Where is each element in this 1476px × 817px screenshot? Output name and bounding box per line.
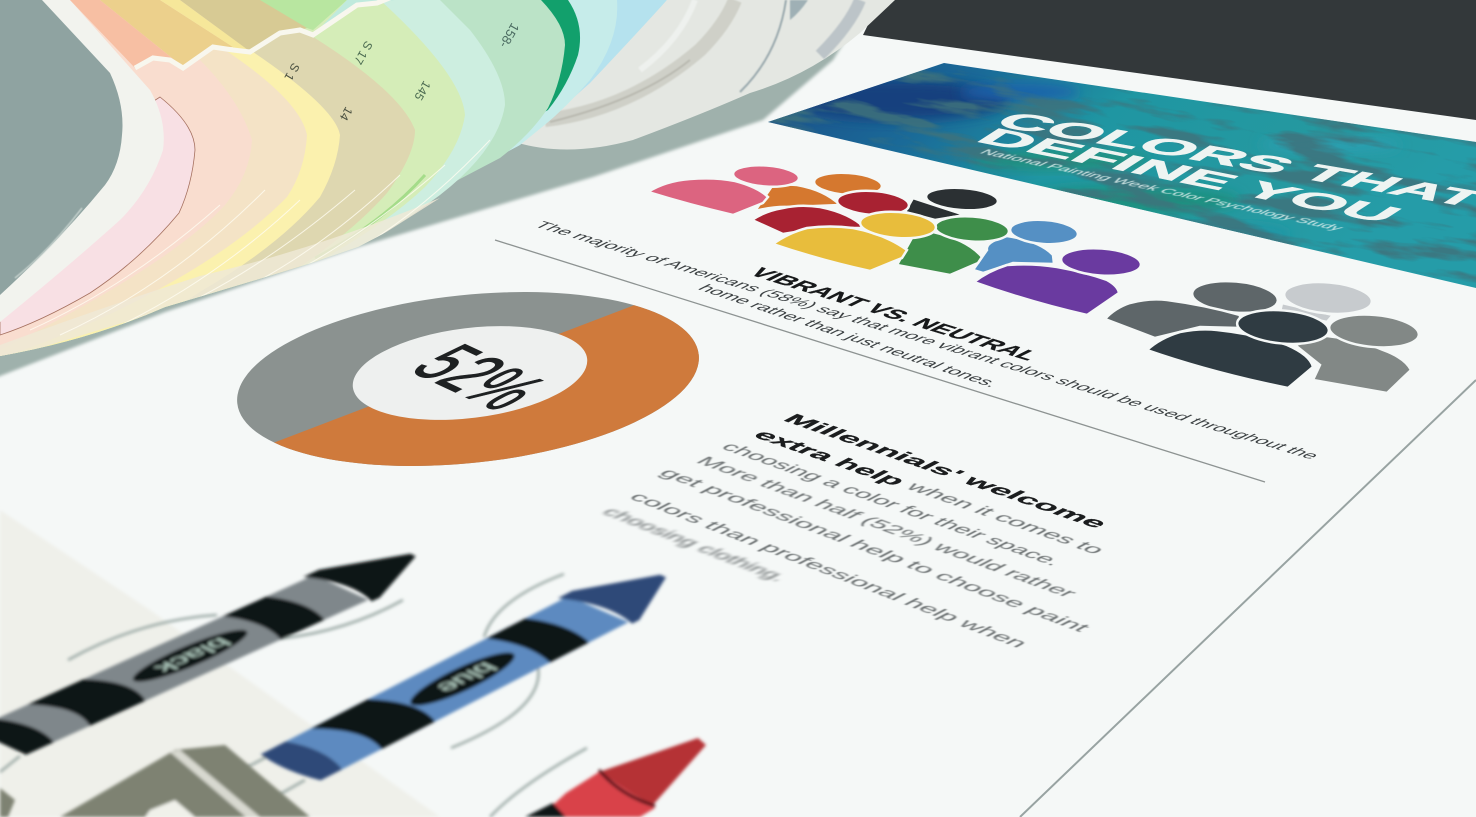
heading line 1: Millennials' welcome xyxy=(777,411,1113,531)
light green swatch xyxy=(440,0,565,180)
crayon tip xyxy=(599,738,706,806)
salmon swatch xyxy=(70,0,177,68)
fan shadow on paper xyxy=(0,0,870,380)
yellow strip xyxy=(160,0,248,50)
donut chart 52% xyxy=(237,292,699,466)
pink swatch stack xyxy=(0,97,195,335)
roll body xyxy=(515,0,895,150)
crayon body xyxy=(254,561,697,784)
heading: VIBRANT VS. NEUTRAL xyxy=(743,265,1046,363)
swatch code: S 1: S 1 xyxy=(281,60,303,83)
gloss highlight on gray card xyxy=(15,208,82,278)
orange person xyxy=(755,171,883,211)
title line 2: DEFINE YOU xyxy=(967,124,1410,227)
gold swatch xyxy=(100,0,233,68)
body line 1: when it comes to xyxy=(900,479,1111,556)
red person xyxy=(752,189,910,234)
crayon body: blue xyxy=(431,660,504,696)
white swatch roll xyxy=(515,0,895,150)
lighter stripe xyxy=(170,750,260,817)
light green swatch above stair xyxy=(260,0,347,30)
cream lower stack xyxy=(0,198,440,360)
green swatch xyxy=(302,0,465,266)
yellow person xyxy=(773,209,937,271)
motion lines xyxy=(236,574,564,800)
swatch code: 145: 145 xyxy=(411,78,434,103)
red crayon xyxy=(490,738,706,817)
layered card edges xyxy=(30,140,490,335)
pale mint tile xyxy=(322,0,392,26)
white card border xyxy=(0,0,164,322)
orange segment xyxy=(274,305,699,466)
donut hole xyxy=(347,314,593,432)
paint swatch fan xyxy=(0,0,667,356)
mint swatches xyxy=(336,0,505,252)
donut value: 52% xyxy=(392,334,568,421)
neutral people icon group xyxy=(1105,278,1420,393)
blue person xyxy=(973,218,1079,273)
dark gray person front xyxy=(1147,307,1330,388)
purple person xyxy=(974,246,1142,315)
yellow swatch xyxy=(2,47,340,356)
body line 5: colors than professional help when xyxy=(624,490,1033,650)
beige swatch xyxy=(34,50,307,332)
white stair line xyxy=(135,0,392,68)
black crayon xyxy=(0,541,443,772)
left olive fragment xyxy=(0,788,15,817)
divider line xyxy=(495,240,1265,482)
body line 4: get professional help to choose paint xyxy=(654,466,1097,635)
olive block xyxy=(60,745,310,817)
vibrant people icon group xyxy=(648,163,1142,315)
gray person right xyxy=(1295,311,1420,393)
light gray person xyxy=(1280,279,1373,322)
crayon body xyxy=(540,772,655,817)
blurred olive shape on neighbouring page xyxy=(0,745,310,817)
banner paint texture xyxy=(723,0,1476,367)
section: vibrant vs neutral text xyxy=(529,220,1324,461)
body line 2: choosing a color for their space. xyxy=(716,440,1069,568)
aqua swatch xyxy=(509,0,617,151)
roll layer streaks xyxy=(545,0,860,122)
body line 1: The majority of Americans (58%) say that more vibrant colors should be used throughout the xyxy=(529,220,1324,461)
subtitle: National Painting Week Color Psychology Study xyxy=(976,148,1348,232)
green person xyxy=(897,214,1010,275)
title line 1: COLORS THAT xyxy=(985,108,1476,212)
light blue swatch xyxy=(509,0,667,151)
crayon body xyxy=(0,541,443,756)
crayon collar xyxy=(599,770,655,806)
swatch code: S 17: S 17 xyxy=(351,38,376,67)
bright green edge xyxy=(362,174,426,228)
motion lines xyxy=(0,600,403,772)
black person xyxy=(905,186,999,220)
dark table background xyxy=(863,0,1476,120)
peach swatch xyxy=(0,0,252,350)
white notch xyxy=(145,800,195,817)
crayon body: black xyxy=(149,635,237,675)
body line 3: More than half (52%) would rather xyxy=(691,454,1083,600)
page border line xyxy=(1020,380,1476,817)
blurred neighbouring page, bottom left xyxy=(0,510,440,817)
body line 2: home rather than just neutral tones. xyxy=(693,283,1004,389)
mid gray person left xyxy=(1105,278,1279,338)
tan swatch xyxy=(180,0,307,52)
swatch code: 158: 158- xyxy=(496,20,522,51)
crayon black band xyxy=(525,803,566,817)
gray segment xyxy=(228,271,708,487)
header banner xyxy=(768,63,1476,288)
gray paint card xyxy=(0,0,122,295)
body line 6: choosing clothing. xyxy=(597,505,793,584)
painted banner background xyxy=(768,63,1476,288)
section: millennials text xyxy=(597,411,1113,650)
pink person xyxy=(648,163,800,215)
khaki swatch xyxy=(42,32,415,348)
motion line xyxy=(490,748,587,817)
blue crayon xyxy=(236,561,697,800)
heading line 2: extra help xyxy=(747,427,911,488)
dark green swatch xyxy=(18,0,580,353)
swatch code: 14: 14 xyxy=(337,104,356,123)
